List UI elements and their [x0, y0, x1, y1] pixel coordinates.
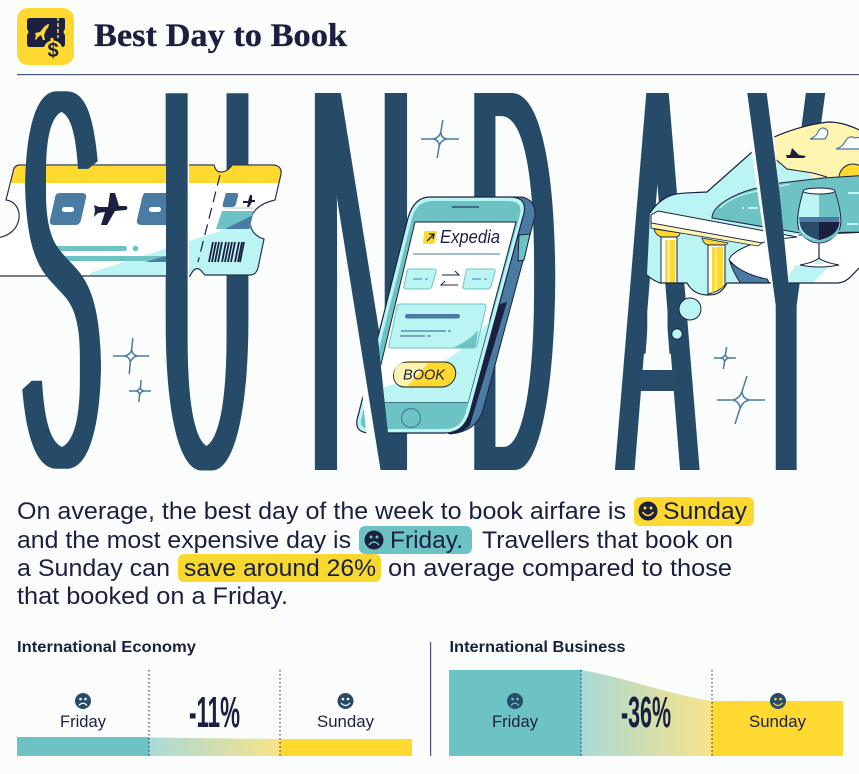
phone face — [357, 197, 524, 433]
Expedia logo: Expedia — [440, 226, 500, 247]
Sunday bar — [712, 701, 843, 756]
gradient connector — [149, 738, 280, 756]
icon: ticket with dollar sign — [17, 8, 74, 65]
Expedia logo — [423, 230, 500, 247]
chart divider — [430, 642, 431, 756]
happy face — [338, 693, 354, 709]
illustration: boarding pass ticket — [0, 164, 282, 277]
dotted markers — [149, 670, 280, 756]
illustration: thought cloud with seaside view — [647, 120, 859, 295]
paragraph highlight: Sunday — [634, 497, 754, 526]
paragraph text: Travellers that book on — [482, 527, 733, 554]
chart: International Business: -36% — [621, 688, 671, 737]
icon: sparkle stars right — [714, 347, 765, 424]
Sunday bar — [280, 739, 412, 756]
sad face — [507, 693, 523, 709]
paragraph text: a Sunday can — [17, 555, 170, 582]
paragraph text: On average, the best day of the week to book airfare is — [17, 498, 626, 525]
dotted markers — [581, 670, 712, 756]
small clouds — [810, 128, 828, 139]
details card — [389, 304, 486, 348]
water — [712, 175, 859, 233]
heading: International Business — [450, 639, 626, 656]
book button: BOOK — [403, 368, 446, 384]
sun — [838, 164, 859, 176]
columns — [654, 229, 680, 237]
cloud outline — [647, 122, 859, 295]
illustration: smartphone booking screen — [357, 197, 535, 434]
letter A crossbar — [638, 370, 676, 391]
title: Best Day to Book — [94, 18, 348, 54]
Sunday label: Sunday — [317, 713, 375, 731]
icon: sparkle star centre — [421, 120, 459, 158]
sad face — [75, 693, 91, 709]
paragraph highlight: save around 26% — [178, 554, 381, 582]
hill line — [776, 159, 828, 178]
chart: International Business — [449, 639, 843, 756]
paragraph text: Friday. — [390, 527, 463, 554]
gradient connector — [581, 670, 712, 756]
table — [728, 232, 859, 283]
percentage: -11% — [189, 688, 240, 737]
header rule — [17, 74, 859, 75]
paragraph text: Sunday — [663, 498, 747, 525]
chart: International Economy — [17, 639, 412, 756]
paragraph text: on average compared to those — [388, 555, 732, 582]
Friday bar — [17, 737, 149, 756]
happy face — [770, 693, 786, 709]
icon: happy face in paragraph — [638, 502, 658, 520]
paragraph text: save around 26% — [184, 555, 376, 582]
icon: ticket with dollar sign: $ — [47, 40, 59, 62]
phone screen — [372, 222, 516, 402]
paragraph text — [17, 498, 747, 610]
route boxes — [404, 269, 495, 289]
small plane — [786, 148, 806, 158]
Friday bar — [449, 670, 581, 756]
paragraph highlight: Friday — [359, 526, 472, 554]
thought bubbles — [672, 298, 701, 339]
Friday label: Friday — [492, 713, 539, 731]
Friday label: Friday — [60, 713, 107, 731]
paragraph text: that booked on a Friday. — [17, 583, 288, 610]
phone back body — [440, 197, 535, 434]
heading: International Economy — [17, 639, 196, 656]
icon: sparkle stars left — [113, 338, 151, 402]
icon: sad face in paragraph — [364, 530, 384, 550]
column beam — [651, 211, 797, 243]
wine glass — [798, 188, 841, 267]
paragraph text: and the most expensive day is — [17, 527, 351, 554]
Sunday label: Sunday — [749, 713, 807, 731]
book button — [392, 362, 457, 387]
sky — [774, 122, 859, 178]
